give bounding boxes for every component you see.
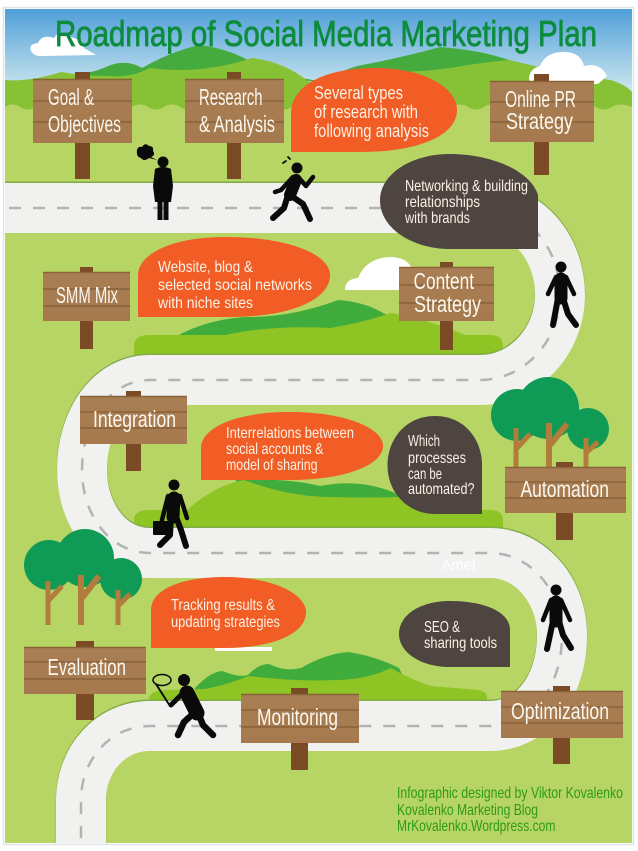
bubble: interrelations — [201, 412, 383, 480]
sign: Online PR Strategy: Online PR — [505, 86, 576, 112]
sign: Optimization — [501, 686, 623, 764]
bubble: website and networks: selected social networks — [158, 277, 312, 294]
sign: Research & Analysis — [185, 72, 284, 179]
bubble: tracking results: updating strategies — [171, 614, 280, 631]
bubble: automation question: automated? — [408, 481, 475, 498]
bubble: research note: of research with — [314, 102, 418, 122]
sign: Integration: Integration — [93, 406, 176, 432]
person: man with net — [153, 674, 213, 735]
sign: Goal & Objectives — [33, 72, 132, 179]
bubble: research note: following analysis — [314, 121, 429, 141]
sign: SMM Mix — [43, 267, 130, 349]
bubble: website and networks — [138, 237, 330, 317]
sign: Online PR Strategy — [490, 74, 594, 175]
bubble: interrelations: Interrelations between — [226, 425, 354, 442]
sign: Content Strategy: Strategy — [414, 291, 481, 317]
left cloud in the sky — [30, 34, 96, 56]
person: walking man on first bend — [548, 262, 576, 325]
sign: Goal & Objectives: Goal & — [48, 84, 94, 110]
person: walking man on second bend — [543, 584, 571, 649]
sign: Goal & Objectives: Objectives — [48, 111, 121, 137]
sign: SMM Mix: SMM Mix — [56, 282, 118, 308]
bubble: networking: relationships — [405, 194, 480, 211]
sign: Content Strategy: Content — [414, 268, 474, 294]
person: man with briefcase — [153, 480, 187, 546]
winding road — [0, 207, 562, 850]
sign: Integration — [80, 391, 187, 471]
sign: Evaluation — [24, 641, 146, 720]
credits — [397, 785, 623, 835]
sign: Optimization: Optimization — [511, 698, 609, 724]
bubble: networking: with brands — [404, 210, 470, 227]
bubble: SEO — [399, 601, 510, 667]
bubble: automation question: can be — [408, 466, 442, 483]
faint road label: Amet — [442, 557, 477, 574]
sign: Research & Analysis: Research — [199, 84, 262, 110]
distant hills — [5, 46, 632, 110]
credits: MrKovalenko.Wordpress.com — [397, 818, 556, 835]
bubble: networking: Networking & building — [405, 178, 528, 195]
bubble: automation question — [388, 416, 482, 514]
bubble: automation question: Which — [408, 433, 440, 450]
sign: Automation: Automation — [520, 476, 609, 502]
hills between road 1 and 2 — [134, 300, 503, 358]
sign: Online PR Strategy: Strategy — [506, 108, 573, 134]
bubble: networking — [380, 154, 538, 249]
right cloud — [529, 52, 607, 84]
bubble: interrelations: social accounts & — [226, 441, 324, 458]
bubble: website and networks: with niche sites — [157, 295, 253, 312]
bubble: tracking results: Tracking results & — [171, 597, 275, 614]
bubble: automation question: processes — [408, 450, 466, 467]
bubble: research note: Several types — [314, 83, 403, 103]
sign: Monitoring — [241, 688, 359, 770]
sign: Content Strategy — [399, 262, 494, 350]
bubble: SEO: SEO & — [424, 619, 460, 636]
sign: Evaluation: Evaluation — [48, 654, 126, 680]
sky — [5, 9, 632, 99]
bubble: website and networks: Website, blog & — [158, 259, 253, 276]
person: running man — [273, 157, 313, 219]
credits: Kovalenko Marketing Blog — [397, 802, 538, 819]
hills between road 2 and 3 — [134, 480, 503, 531]
cloud behind content strategy — [345, 257, 412, 290]
bubble: tracking results — [151, 577, 306, 651]
sign: Research & Analysis: & Analysis — [199, 111, 275, 137]
person: thinking woman — [137, 144, 173, 220]
sign: Automation — [505, 462, 626, 540]
bubble: research note — [291, 68, 457, 152]
bubble: SEO: sharing tools — [424, 635, 497, 652]
trees right — [491, 377, 609, 468]
sign: Monitoring: Monitoring — [257, 704, 338, 730]
trees left — [24, 529, 142, 625]
hills between road 3 and 4 — [149, 652, 487, 704]
bubble: interrelations: model of sharing — [226, 457, 318, 474]
